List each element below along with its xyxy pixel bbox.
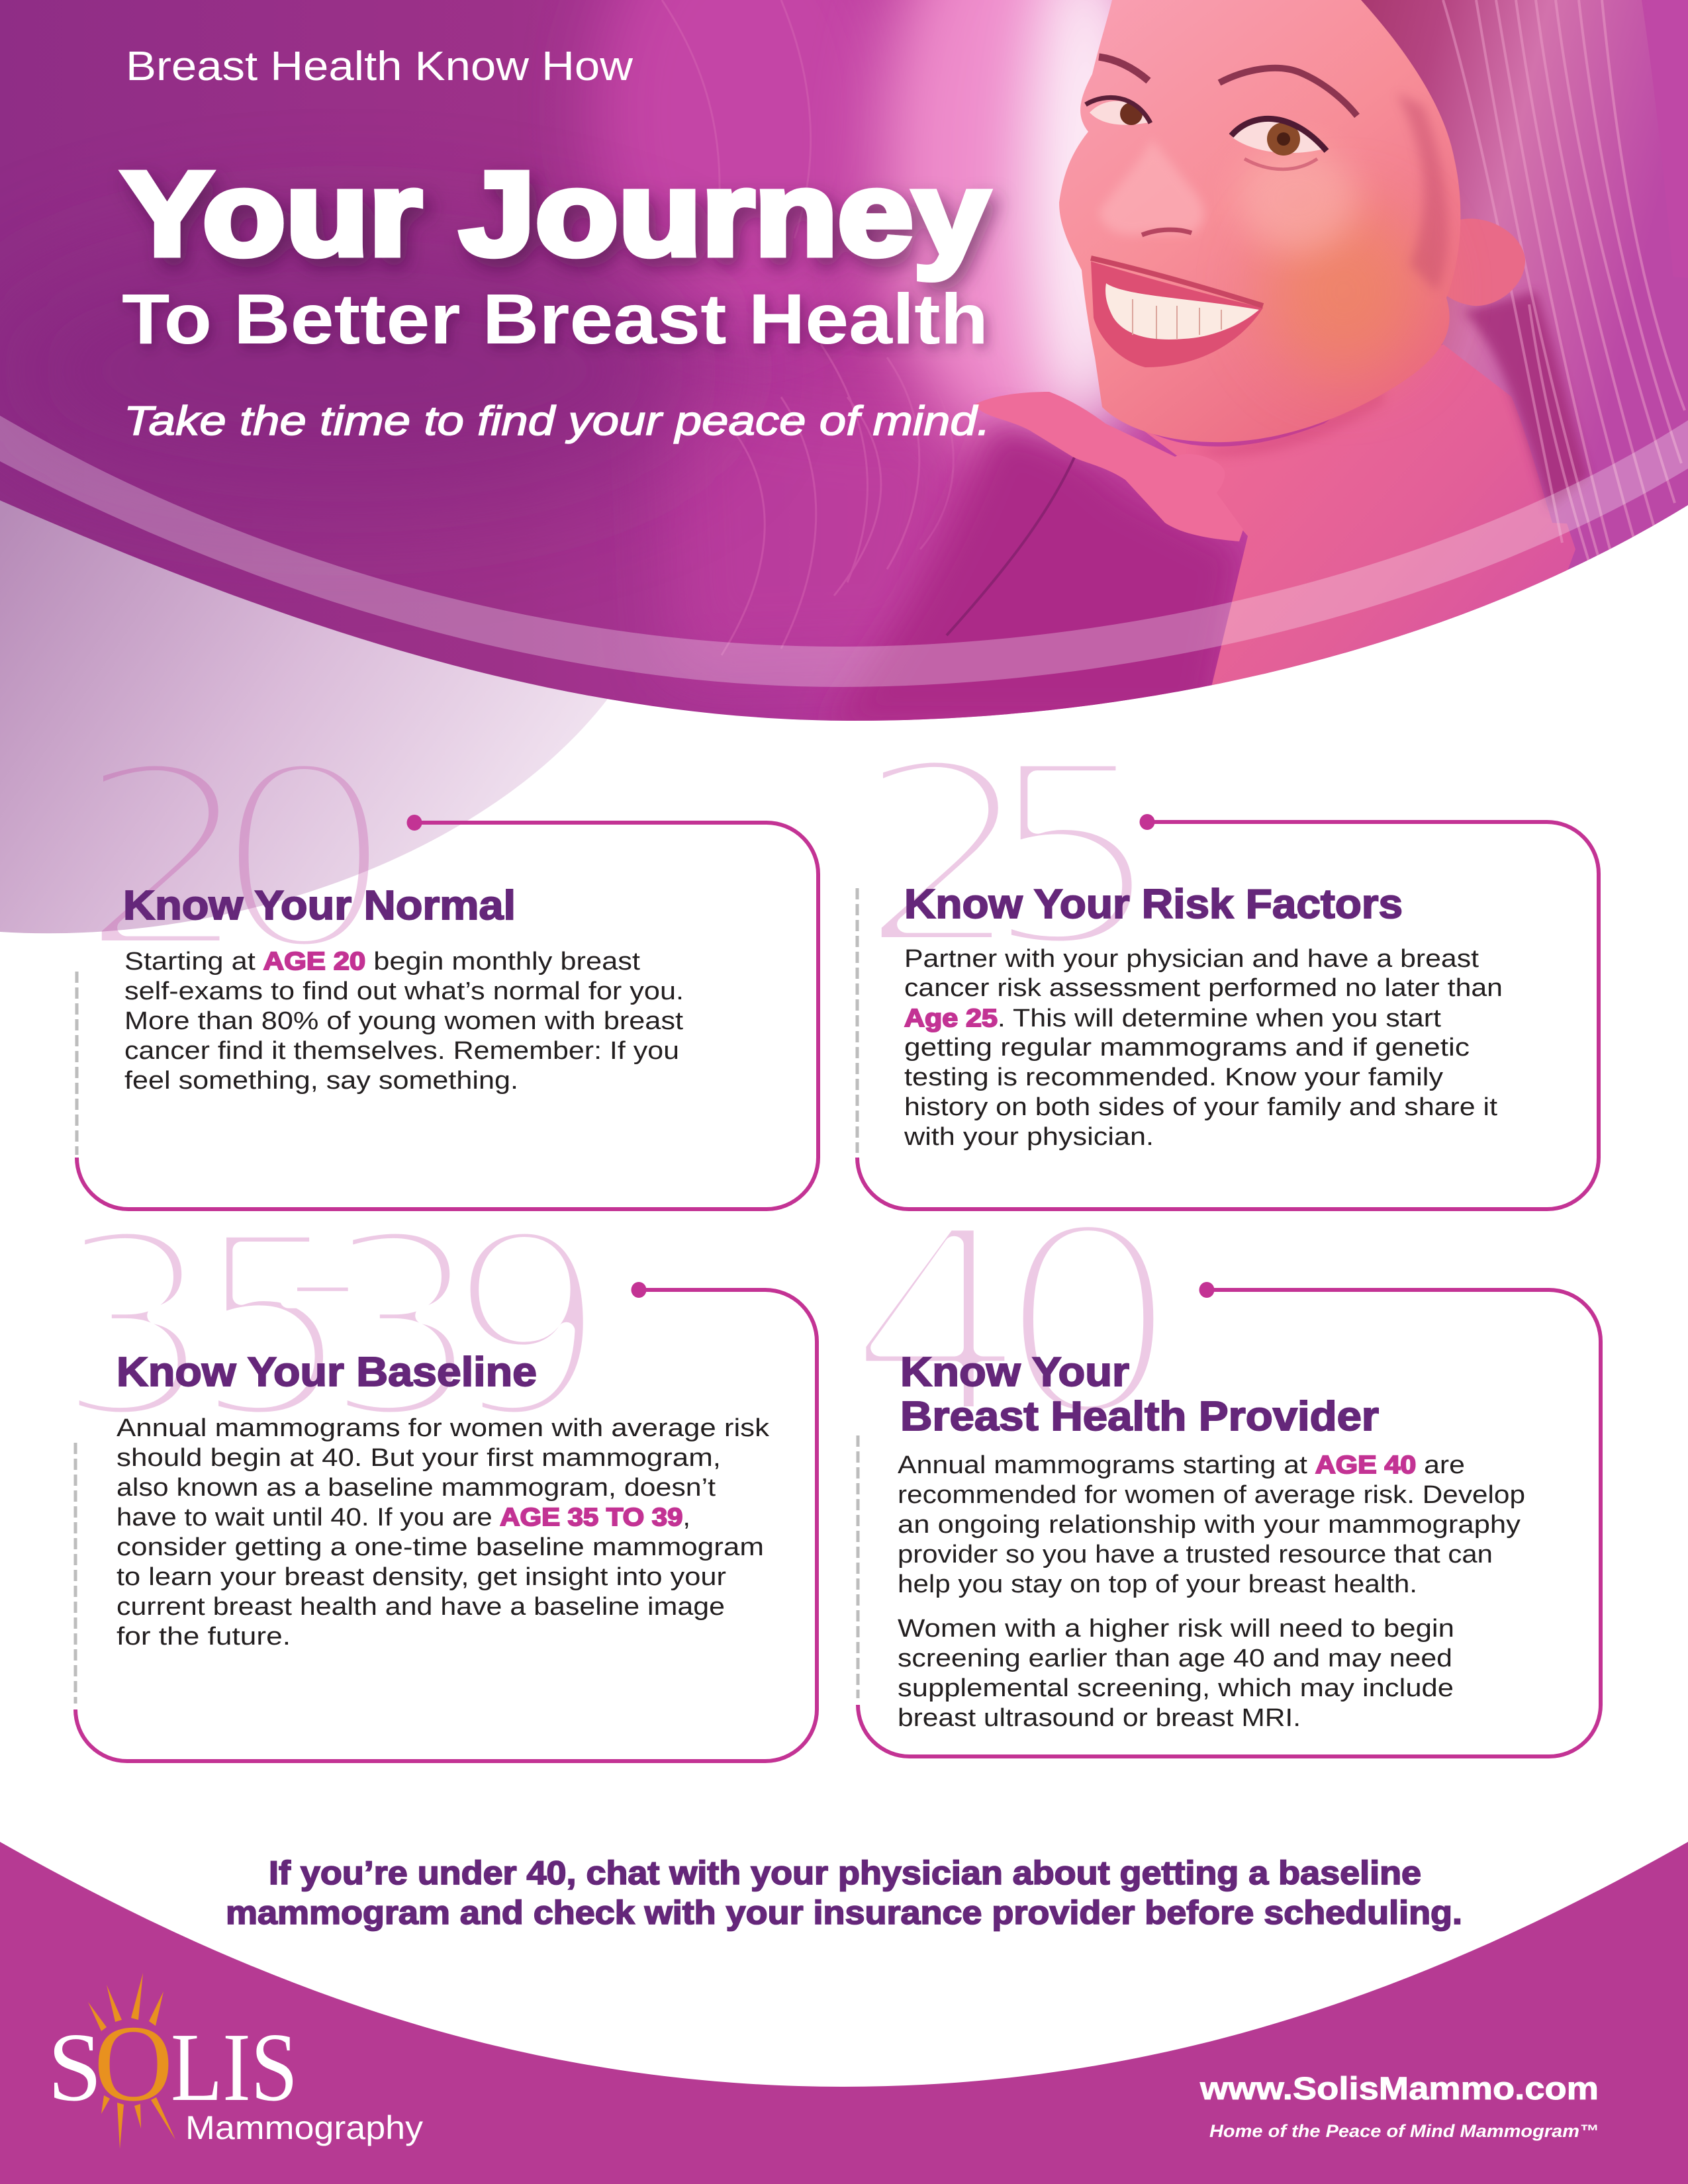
- body text: Women with a higher risk will need to begin: [898, 1615, 1454, 1643]
- body text: to learn your breast density, get insight into your: [117, 1563, 726, 1591]
- website: www.SolisMammo.com: [1199, 2071, 1599, 2107]
- background swirl: [0, 490, 616, 933]
- body text: cancer find it themselves. Remember: If you: [124, 1037, 679, 1065]
- wordmark: LIS: [171, 2013, 298, 2122]
- body text: getting regular mammograms and if genetic: [904, 1034, 1470, 1062]
- eyes: [1090, 101, 1149, 125]
- body text: screening earlier than age 40 and may need: [898, 1645, 1452, 1672]
- big number 40: [841, 1211, 1178, 1436]
- body text: [117, 1414, 770, 1651]
- wordmark: S: [48, 2013, 102, 2122]
- card outline: [75, 1282, 817, 1761]
- nose: [1099, 139, 1204, 235]
- body text: [898, 1451, 1525, 1732]
- panel: age 40: [841, 1211, 1601, 1756]
- body text: with your physician.: [904, 1123, 1154, 1151]
- body text: self-exams to find out what’s normal for you.: [124, 978, 684, 1005]
- hair: [1350, 0, 1688, 596]
- heading: Know Your Baseline: [117, 1349, 537, 1395]
- body text: help you stay on top of your breast health.: [898, 1570, 1417, 1598]
- callout text: If you’re under 40, chat with your physician about getting a baseline: [269, 1854, 1421, 1891]
- curved translucent band: [0, 416, 1688, 687]
- body text: testing is recommended. Know your family: [904, 1064, 1443, 1091]
- heading: Know Your Risk Factors: [904, 882, 1403, 927]
- header photo panel: [0, 0, 1688, 728]
- body text: Annual mammograms starting at AGE 40 are: [898, 1451, 1465, 1479]
- body text: More than 80% of young women with breast: [124, 1007, 683, 1035]
- slogan: Home of the Peace of Mind Mammogram™: [1209, 2121, 1599, 2141]
- big number 20: [66, 741, 410, 966]
- body text: [124, 948, 684, 1095]
- tagline: Take the time to find your peace of mind.: [124, 398, 990, 444]
- body text: for the future.: [117, 1623, 291, 1651]
- body text: have to wait until 40. If you are AGE 35 TO 39 ,: [117, 1504, 690, 1531]
- body text: Annual mammograms for women with average risk: [117, 1414, 770, 1442]
- footer band: [0, 1842, 1688, 2184]
- heading: Know Your Normal: [123, 883, 516, 929]
- ear: [1447, 218, 1525, 306]
- body text: consider getting a one-time baseline mammogram: [117, 1533, 764, 1561]
- body text: Starting at AGE 20 begin monthly breast: [124, 948, 640, 976]
- big number 25: [847, 741, 1165, 966]
- card outline: [857, 814, 1599, 1209]
- body text: should begin at 40. But your first mammogram,: [117, 1444, 721, 1472]
- heading: [900, 1349, 1379, 1439]
- card outline: [77, 815, 818, 1209]
- heading: Breast Health Provider: [900, 1394, 1379, 1439]
- body text: recommended for women of average risk. Develop: [898, 1481, 1525, 1509]
- logo tagline: Mammography: [185, 2109, 423, 2146]
- body text: supplemental screening, which may include: [898, 1674, 1454, 1702]
- body text: an ongoing relationship with your mammography: [898, 1511, 1521, 1539]
- panel: age 20: [66, 741, 818, 1209]
- body text: feel something, say something.: [124, 1067, 518, 1095]
- body text: [904, 945, 1503, 1151]
- body text: Partner with your physician and have a breast: [904, 945, 1479, 973]
- callout text: [226, 1854, 1462, 1931]
- body text: breast ultrasound or breast MRI.: [898, 1704, 1301, 1732]
- big number 35-39: [46, 1211, 629, 1436]
- body text: history on both sides of your family and share it: [904, 1093, 1497, 1121]
- hand on shoulder: [974, 392, 1243, 541]
- main title: Your Journey: [122, 148, 989, 281]
- wordmark: [48, 2003, 298, 2124]
- body text: Age 25 . This will determine when you start: [904, 1005, 1441, 1032]
- panel: age 25: [847, 741, 1599, 1209]
- icon: sun rays: [88, 1973, 175, 2149]
- wordmark: O: [94, 2003, 173, 2124]
- heading: Know Your: [900, 1349, 1129, 1395]
- neck and chest: [1145, 344, 1575, 686]
- body text: also known as a baseline mammogram, doesn’t: [117, 1474, 716, 1502]
- logo: Solis Mammography: [48, 1973, 423, 2149]
- face: [1059, 0, 1460, 442]
- panel: age 35 to 39: [46, 1211, 817, 1761]
- card outline: [858, 1282, 1601, 1756]
- subtitle: To Better Breast Health: [122, 279, 988, 359]
- shoulder: [827, 424, 1244, 728]
- body text: provider so you have a trusted resource that can: [898, 1541, 1493, 1569]
- mouth: [1091, 261, 1263, 367]
- callout text: mammogram and check with your insurance provider before scheduling.: [226, 1894, 1462, 1931]
- body text: cancer risk assessment performed no later than: [904, 974, 1503, 1002]
- header eyebrow text: Breast Health Know How: [126, 44, 633, 89]
- eyebrows: [1099, 57, 1149, 81]
- body text: current breast health and have a baseline image: [117, 1593, 725, 1621]
